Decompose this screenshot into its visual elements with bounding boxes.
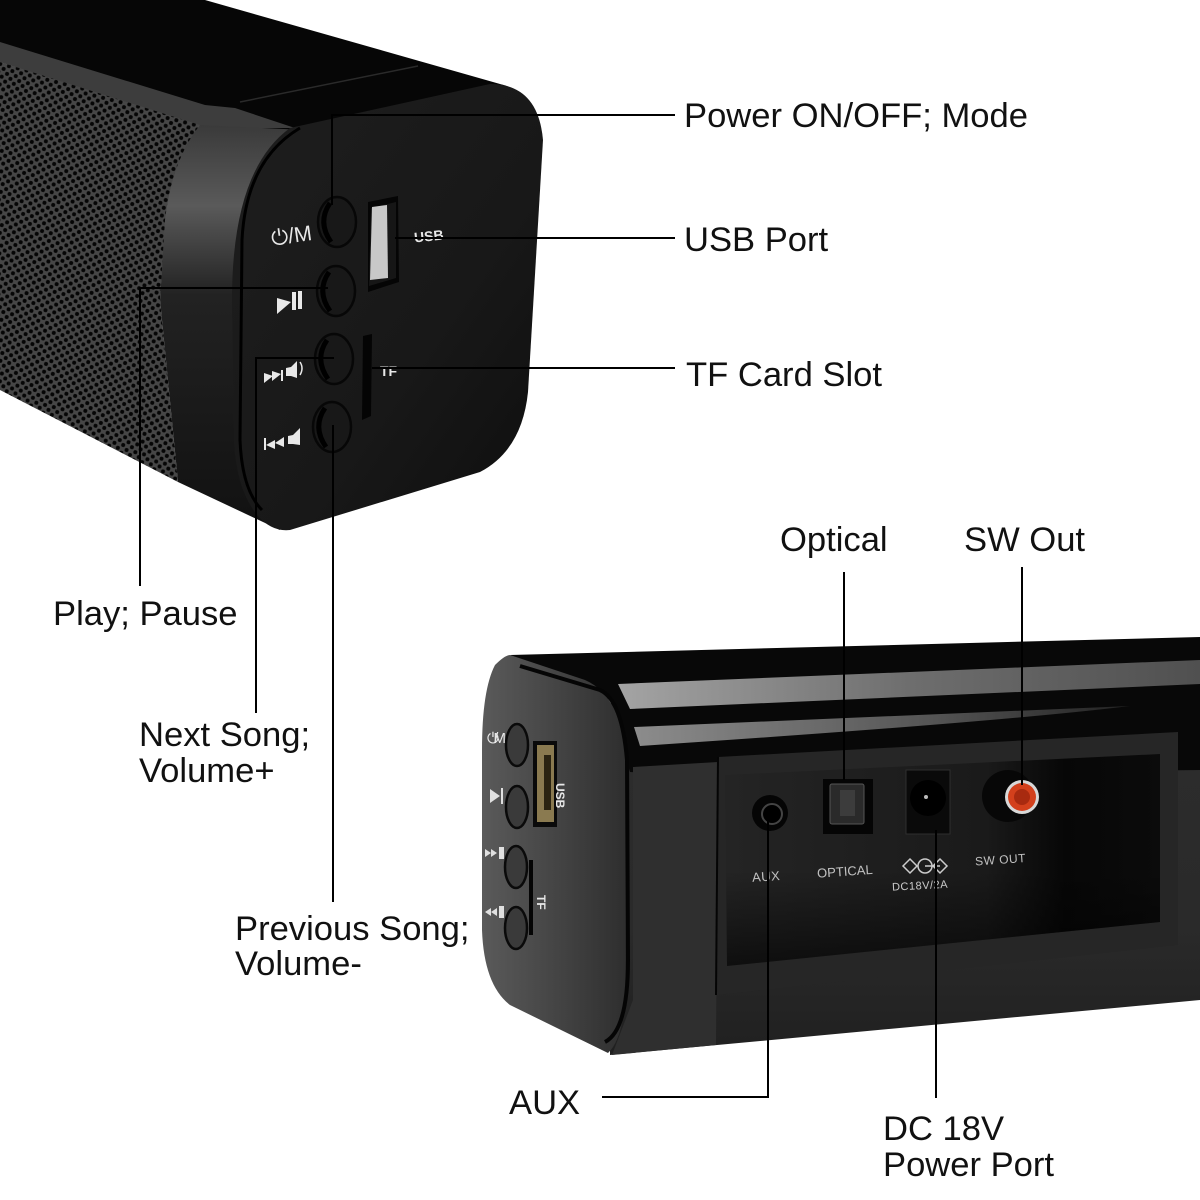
- end cap face: [232, 84, 543, 530]
- USB label small: USB: [553, 783, 567, 809]
- callout: play pause: Play; Pause: [53, 595, 238, 633]
- previous icon small: [485, 906, 504, 918]
- AUX jack: [752, 795, 788, 831]
- TF label: TF: [380, 363, 398, 379]
- USB port, gold: [533, 741, 557, 827]
- callout: play pause: [53, 288, 328, 633]
- end face: [482, 655, 627, 1053]
- speaker: rear ports view: [482, 637, 1200, 1055]
- control button 3: [505, 846, 527, 888]
- TF slot small: [529, 860, 533, 935]
- upper dark surface: [510, 637, 1200, 775]
- end cap seam: [240, 66, 418, 102]
- OPTICAL label: OPTICAL: [817, 862, 873, 881]
- control button 4: [505, 907, 527, 949]
- recess frame: [716, 732, 1178, 995]
- callout: AUX: AUX: [509, 1084, 580, 1122]
- DC label: DC18V/2A: [892, 879, 948, 894]
- optical port: [823, 779, 873, 834]
- glossy bezel: [160, 125, 305, 530]
- callout: previous song: Previous Song;: [235, 910, 470, 948]
- callout: next song: Next Song;: [139, 716, 310, 754]
- callout: previous song: Volume-: [235, 945, 362, 983]
- callout: DC power: [883, 830, 1054, 1184]
- callout: next song: Volume+: [139, 752, 275, 790]
- AUX label: AUX: [752, 868, 781, 885]
- callout: optical: Optical: [780, 521, 888, 559]
- play icon small: [490, 788, 503, 804]
- control button 1: [506, 724, 528, 766]
- side panel: [612, 762, 718, 1055]
- callout: TF card slot: TF Card Slot: [686, 356, 882, 394]
- face rim: [520, 666, 628, 1042]
- play button: [317, 266, 355, 316]
- callout: power: [332, 97, 1028, 205]
- callout: DC power: DC 18V: [883, 1110, 1004, 1148]
- control button 2: [506, 786, 528, 828]
- face inner rim: [240, 128, 300, 510]
- frame left edge: [716, 757, 718, 995]
- SW OUT label: SW OUT: [975, 851, 1027, 869]
- glossy band upper: [618, 660, 1200, 709]
- recess cavity: [725, 754, 1160, 966]
- glossy band lower: [634, 706, 1130, 746]
- TF label small: TF: [534, 895, 548, 910]
- glossy top strip: [0, 42, 295, 128]
- small control labels: ⏻/M: [487, 730, 506, 747]
- button icon: next/volume up: [264, 361, 302, 383]
- button icon: play/pause: [277, 291, 302, 314]
- USB port: [368, 196, 399, 292]
- long body: [610, 735, 1200, 1055]
- power button: [318, 197, 356, 247]
- previous button: [313, 402, 351, 452]
- top surface: [0, 0, 535, 132]
- USB label: USB: [413, 227, 444, 246]
- SW out jack: [982, 770, 1039, 822]
- speaker: close-up of control end: [0, 0, 543, 530]
- polarity symbol: [903, 859, 947, 873]
- callout: power: Power ON/OFF; Mode: [684, 97, 1028, 135]
- TF slot: [362, 334, 372, 420]
- button icon: previous/volume down: [264, 428, 300, 450]
- mesh grille: [0, 62, 200, 482]
- next icon small: [485, 847, 504, 859]
- callout: USB port: USB Port: [684, 221, 829, 259]
- next button: [315, 334, 353, 384]
- callout: AUX: [509, 815, 768, 1122]
- button icon: power/mode: ⏻/M: [270, 221, 313, 251]
- callout: DC power: Power Port: [883, 1146, 1054, 1184]
- cavity lower shade: [725, 754, 1160, 966]
- callout: SW out: SW Out: [964, 521, 1085, 559]
- callout: next song: [139, 358, 334, 790]
- callout: previous song: [235, 425, 470, 983]
- DC jack: [906, 770, 950, 834]
